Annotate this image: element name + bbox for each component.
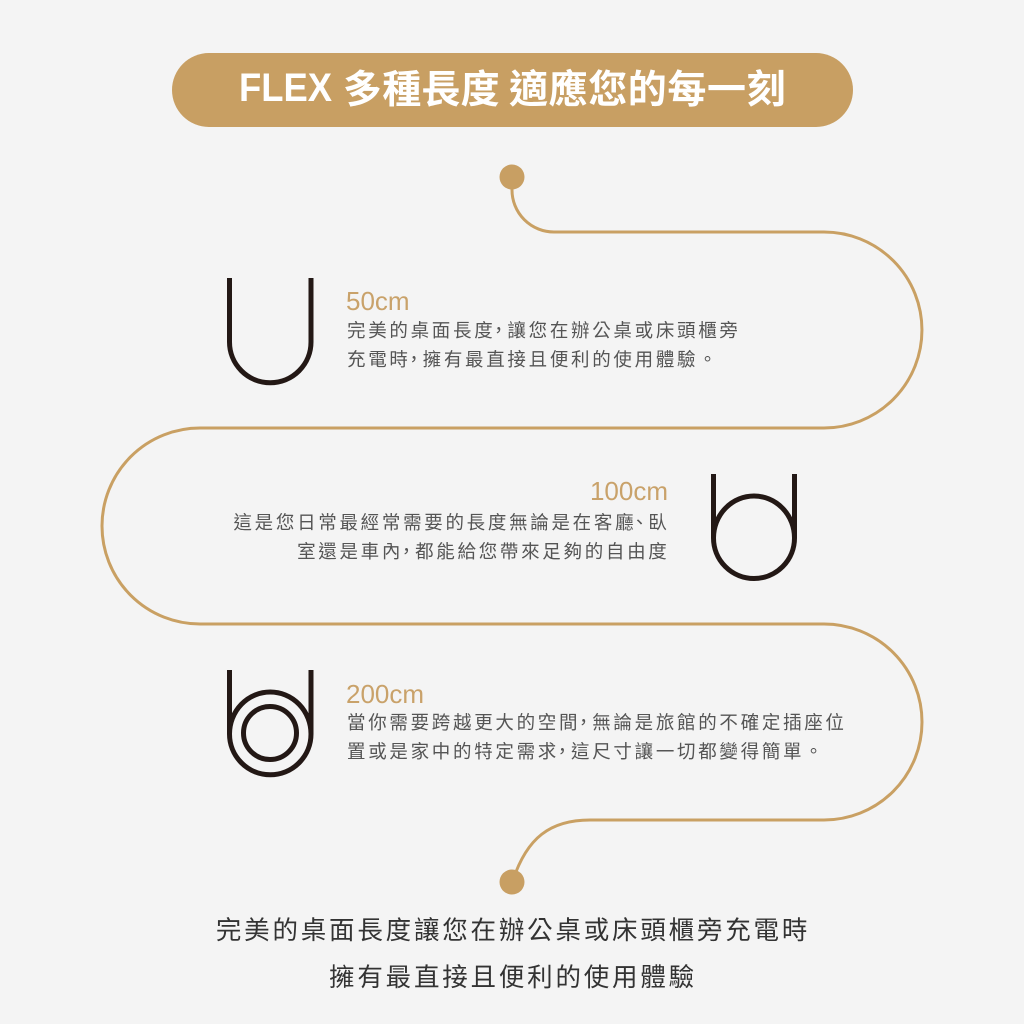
- description: 50cm: 完美的桌面長度， 讓您在辦公桌或床頭櫃旁: [347, 320, 741, 341]
- description: 100cm: 室還是車內， 都能給您帶來足夠的自由度: [297, 540, 670, 562]
- label: 50cm: 50cm: [346, 286, 410, 316]
- description: 50cm: [347, 320, 741, 370]
- label: 200cm: 200cm: [346, 679, 424, 709]
- title banner: [172, 53, 853, 127]
- description: 200cm: 當你需要跨越更大的空間， 無論是旅館的不確定插座位: [347, 712, 847, 733]
- title text: 適應您的每一刻: 適應您的每一刻: [509, 69, 786, 112]
- footer line 1: 完美的桌面長度讓您在辦公桌或床頭櫃旁充電時: [216, 917, 810, 945]
- title text: 多種長度: 多種長度: [343, 69, 500, 112]
- footer line 2: 擁有最直接且便利的使用體驗: [329, 964, 697, 992]
- description: 200cm: [347, 712, 847, 762]
- title text: FLEX: FLEX: [239, 66, 332, 110]
- label: 100cm: 100cm: [590, 476, 668, 506]
- description: 50cm: 充電時， 擁有最直接且便利的使用體驗。: [347, 348, 719, 370]
- description: 200cm: 置或是家中的特定需求， 這尺寸讓一切都變得簡單。: [347, 740, 825, 762]
- description: 100cm: 這是您日常最經常需要的長度無論是在客廳、 臥: [233, 512, 670, 533]
- description: 100cm: [233, 512, 670, 562]
